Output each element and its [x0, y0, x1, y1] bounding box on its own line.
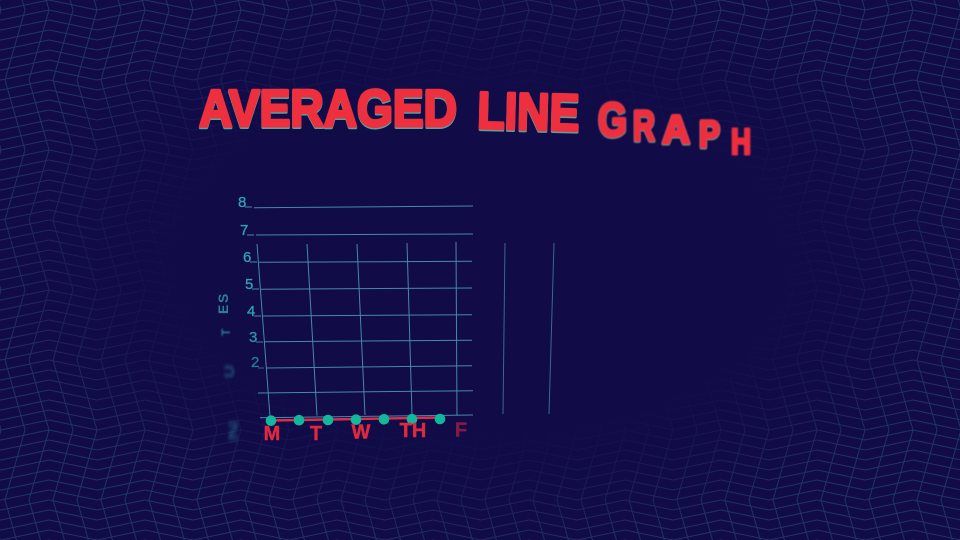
y axis title: minutes: T [219, 328, 233, 336]
title: P [699, 114, 720, 156]
title: AVERAGED [199, 80, 457, 138]
y axis numbers: 5 [245, 276, 253, 293]
data points [266, 414, 445, 426]
title: LINE [477, 82, 580, 143]
x axis day labels [264, 420, 467, 445]
y axis title: minutes: U [222, 365, 237, 378]
y axis title: minutes: N [225, 421, 241, 441]
line graph [215, 194, 554, 445]
red data line [271, 418, 440, 420]
title: H [731, 121, 751, 162]
y axis numbers: 8 [238, 194, 246, 211]
y axis title: minutes: S [215, 294, 231, 303]
y axis title: minutes [215, 294, 241, 441]
title: A [662, 108, 690, 152]
title: P [699, 115, 720, 157]
y axis numbers: 6 [243, 249, 251, 266]
y axis numbers: 3 [249, 329, 257, 346]
grid lines [254, 206, 554, 418]
title: G [598, 94, 627, 147]
y axis numbers: 4 [247, 303, 255, 320]
y axis numbers: 7 [240, 222, 248, 239]
x axis day labels: TH [400, 420, 426, 442]
x axis day labels: F [455, 420, 467, 442]
y axis numbers [238, 194, 264, 371]
title: R [633, 103, 655, 151]
title: AVERAGED [199, 82, 457, 140]
title: LINE [477, 84, 580, 144]
x axis day labels: W [352, 422, 371, 444]
x axis day labels: M [264, 423, 280, 445]
y axis numbers: 2 [251, 354, 259, 371]
x axis day labels: T [310, 423, 322, 445]
title: G [598, 95, 627, 148]
y axis title: minutes: E [215, 305, 231, 314]
title [199, 80, 751, 162]
title: R [633, 102, 655, 150]
title: A [662, 109, 690, 153]
